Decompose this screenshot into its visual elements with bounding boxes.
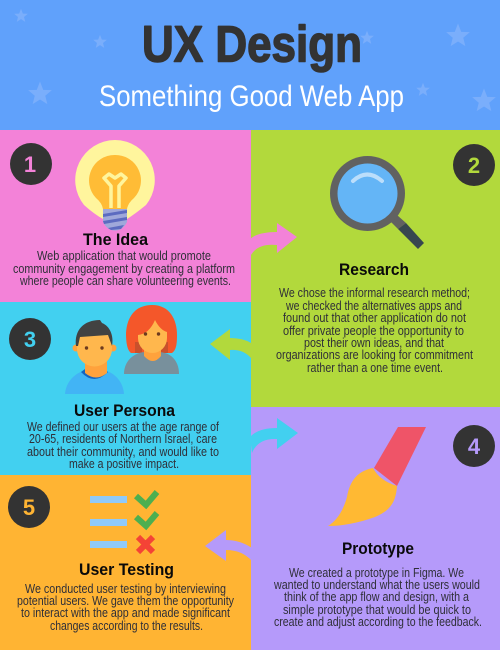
icon: paint brush	[328, 427, 426, 526]
text: user persona: We defined our users at the age range of	[27, 419, 219, 434]
icon: checklist	[90, 492, 157, 552]
panel: user persona	[0, 302, 251, 475]
text: prototype: simple prototype that would be quick to	[283, 602, 471, 617]
heading: user persona: User Persona	[74, 401, 175, 420]
text: prototype: We created a prototype in Figma. We	[289, 565, 464, 580]
subtitle: Something Good Web App	[99, 80, 404, 113]
number badge 5	[8, 486, 50, 528]
text: the idea: Web application that would promote	[37, 248, 211, 263]
heading: research: Research	[339, 260, 409, 279]
icon: light bulb	[75, 140, 155, 230]
arrow: purple, prototype to testing	[205, 530, 252, 561]
panel: prototype	[251, 407, 500, 650]
number badge 1: 1	[24, 152, 36, 177]
arrow: green, research to persona	[210, 329, 251, 360]
panel: header	[0, 0, 500, 130]
number badge 3	[9, 318, 51, 360]
text: user testing	[17, 581, 234, 633]
text: research: we checked the alternatives apps and	[285, 298, 462, 313]
panel: research	[251, 130, 500, 407]
text: research: offer private people the opportunity to	[283, 323, 464, 338]
text: research: rather than a one time event.	[307, 360, 443, 375]
text: the idea	[13, 248, 235, 288]
icon: man	[65, 320, 124, 394]
text: user persona: about their community, and would like to	[27, 444, 219, 459]
number badge 2: 2	[468, 153, 480, 178]
text: research: found out that other application do not	[283, 310, 466, 325]
number badge 1	[10, 143, 52, 185]
text: prototype	[273, 565, 482, 629]
arrow: cyan, persona to prototype	[250, 418, 298, 453]
number badge 5: 5	[23, 495, 35, 520]
panel: user testing	[0, 475, 251, 650]
number badge 2	[453, 144, 495, 186]
arrow: pink, idea to research	[250, 223, 297, 255]
heading: user testing: User Testing	[79, 560, 174, 579]
text: the idea: community engagement by creating a platform	[13, 261, 235, 276]
heading: prototype: Prototype	[342, 539, 414, 558]
text: user testing: to interact with the app and made significant	[21, 605, 230, 620]
text: user persona: 20-65, residents of Northern Israel, care	[29, 431, 217, 446]
text: user testing: potential users. We gave them the opportunity	[17, 593, 234, 608]
heading: the idea: The Idea	[83, 230, 149, 249]
icon: magnifying glass	[330, 156, 424, 249]
text: prototype: think of the app flow and design, with a	[284, 589, 470, 604]
text: user persona: make a positive impact.	[69, 456, 179, 471]
title: UX Design	[142, 16, 362, 72]
number badge 3: 3	[24, 327, 36, 352]
text: user testing: We conducted user testing by interviewing	[25, 581, 226, 596]
panel: the idea	[0, 130, 251, 302]
text: research: post their own ideas, and that	[304, 335, 444, 350]
icon: woman	[124, 305, 179, 374]
text: user persona	[27, 419, 219, 471]
text: the idea: where people can share volunteering events.	[19, 273, 231, 288]
number badge 4: 4	[468, 434, 481, 459]
number badge 4	[453, 425, 495, 467]
text: research	[276, 285, 473, 375]
text: user testing: changes according to the results.	[50, 618, 203, 633]
